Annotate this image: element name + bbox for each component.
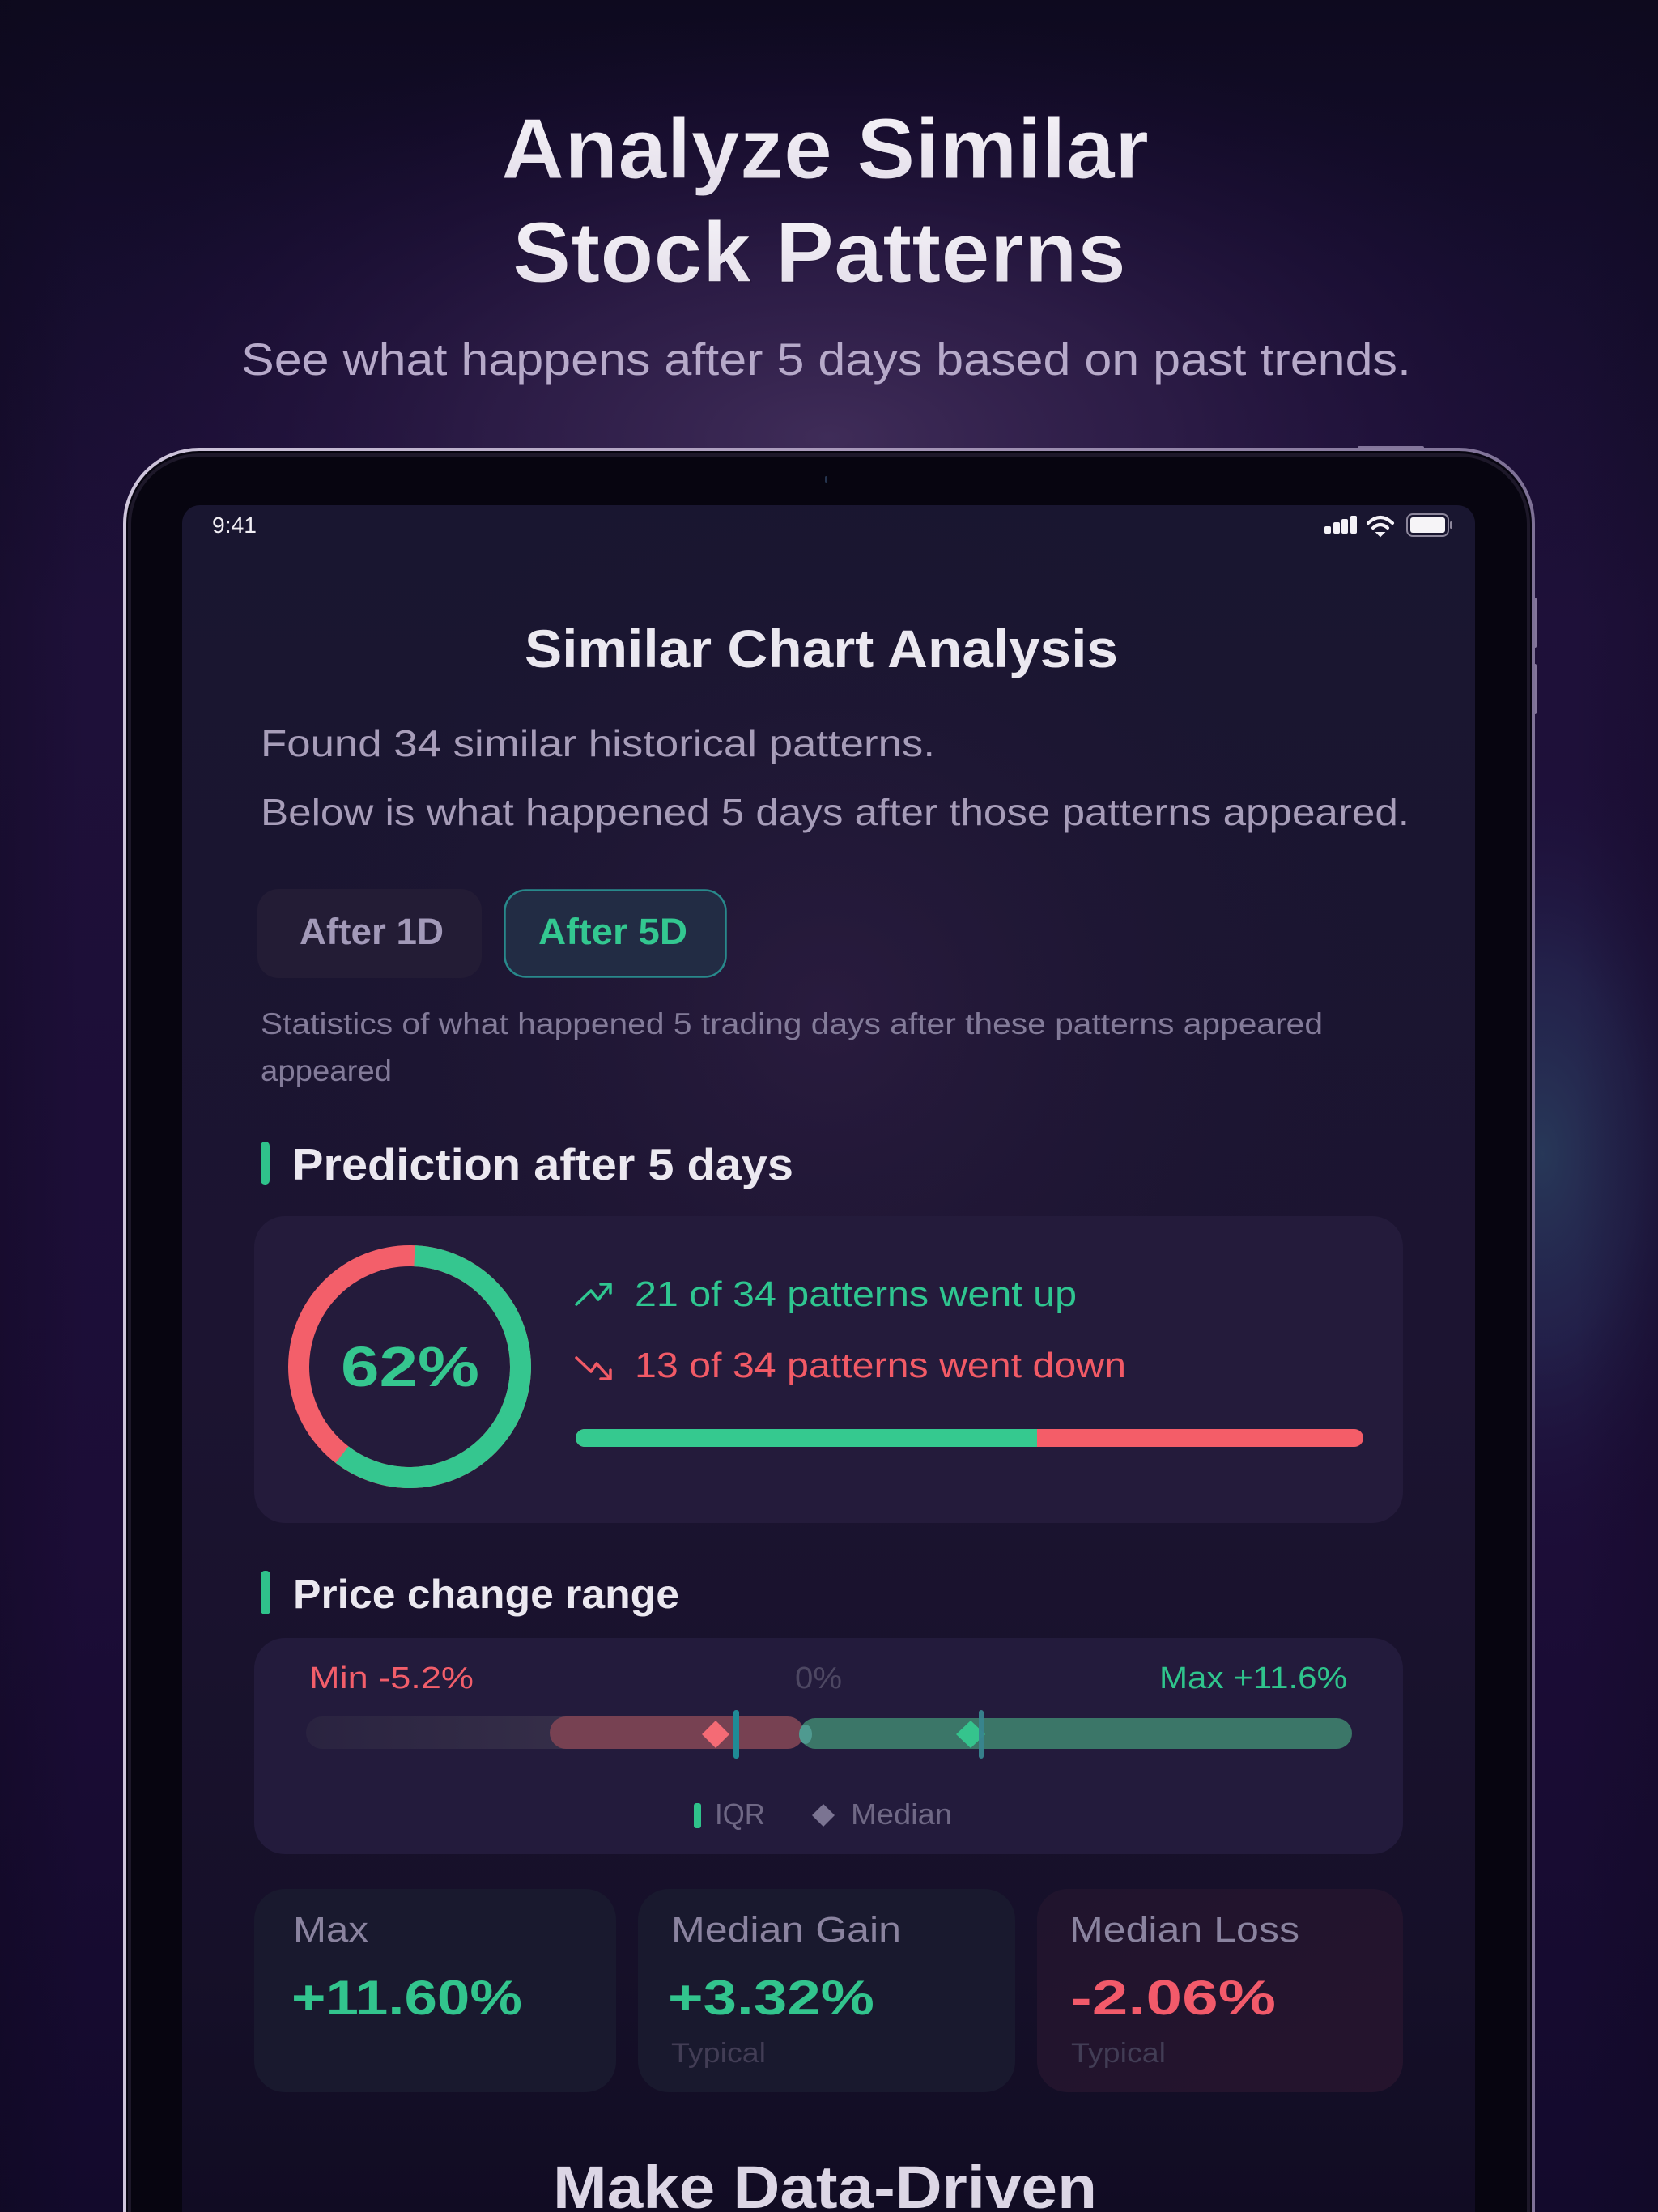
label: min: Min -5.2% bbox=[309, 1661, 474, 1695]
label: zero: 0% bbox=[795, 1661, 842, 1695]
stat: went up: 21 of 34 patterns went up bbox=[635, 1274, 1077, 1314]
label: max: Max +11.6% bbox=[1159, 1661, 1347, 1695]
stat card: median loss: Typical bbox=[1071, 2038, 1166, 2069]
tab: After 5D bbox=[505, 891, 725, 976]
stat: went down: 13 of 34 patterns went down bbox=[635, 1346, 1126, 1385]
caption: appeared bbox=[261, 1054, 392, 1087]
title: Analyze Similar bbox=[501, 101, 1149, 197]
median marker: loss bbox=[702, 1721, 729, 1748]
legend: IQR bbox=[715, 1797, 765, 1831]
panel: prediction bbox=[254, 1216, 1403, 1523]
legend: Median bbox=[851, 1797, 952, 1831]
caption bbox=[261, 1007, 1323, 1087]
stat card: median loss: -2.06% bbox=[1070, 1971, 1276, 2025]
title: Stock Patterns bbox=[512, 205, 1126, 300]
proportion bar bbox=[576, 1429, 1363, 1447]
icon: trending up bbox=[576, 1284, 610, 1304]
stat card: median loss bbox=[1037, 1889, 1403, 2092]
heading: prediction: Prediction after 5 days bbox=[292, 1139, 793, 1189]
stat card: median gain: Median Gain bbox=[671, 1910, 901, 1950]
subtitle: See what happens after 5 days based on past trends. bbox=[241, 334, 1411, 385]
intro text: Below is what happened 5 days after those patterns appeared. bbox=[261, 791, 1409, 833]
heading: price change range: Price change range bbox=[293, 1572, 679, 1617]
title bbox=[501, 101, 1149, 300]
screen heading: Similar Chart Analysis bbox=[525, 619, 1118, 678]
intro text bbox=[261, 722, 1409, 833]
tab: After 1D bbox=[257, 889, 482, 978]
device frame bbox=[125, 446, 1537, 2212]
iqr marker: gain bbox=[979, 1710, 984, 1759]
stat card: max bbox=[254, 1889, 616, 2092]
tab: After 1D: After 1D bbox=[300, 911, 444, 952]
screen bbox=[182, 505, 1475, 2212]
caption: Statistics of what happened 5 trading days after these patterns appeared bbox=[261, 1007, 1323, 1040]
icon: signal bbox=[1324, 516, 1357, 534]
icon: battery bbox=[1407, 514, 1452, 536]
panel: price change range bbox=[254, 1638, 1403, 1854]
donut chart: 62% bbox=[341, 1335, 479, 1398]
stat card: median gain: +3.32% bbox=[668, 1971, 874, 2025]
status bar bbox=[212, 513, 1452, 538]
camera bbox=[825, 476, 827, 483]
stat card: median loss: Median Loss bbox=[1069, 1910, 1299, 1950]
stat card: median gain bbox=[638, 1889, 1015, 2092]
range track bbox=[306, 1710, 1352, 1759]
stat card: max: Max bbox=[293, 1910, 368, 1950]
donut chart bbox=[294, 1251, 525, 1482]
intro text: Found 34 similar historical patterns. bbox=[261, 722, 935, 764]
hardware buttons bbox=[1358, 446, 1537, 714]
legend bbox=[694, 1797, 952, 1831]
tab: After 5D: After 5D bbox=[538, 911, 687, 952]
stat card: median gain: Typical bbox=[671, 2038, 766, 2069]
stat card: max: +11.60% bbox=[291, 1971, 522, 2025]
icon: trending down bbox=[576, 1358, 610, 1379]
time: 9:41 bbox=[212, 513, 257, 538]
median marker: gain bbox=[956, 1721, 985, 1748]
iqr marker: loss bbox=[733, 1710, 739, 1759]
icon: wifi bbox=[1368, 517, 1392, 536]
